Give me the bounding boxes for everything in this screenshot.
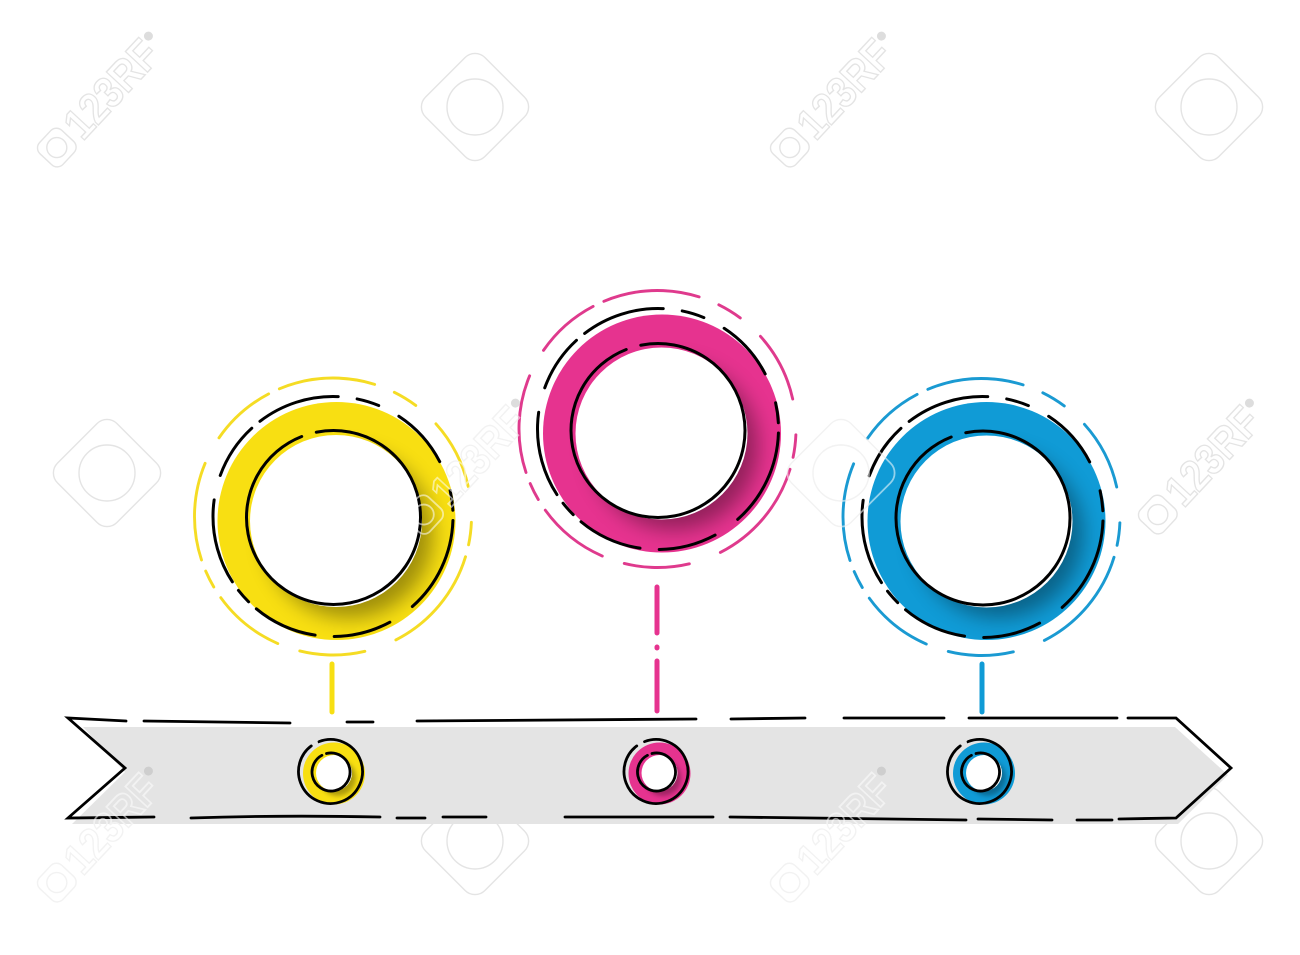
- watermark: camera middle left: [48, 414, 166, 532]
- watermark overlay: logo on banner right: 123RF: [787, 765, 902, 884]
- watermark overlay: logo on banner right: [761, 758, 909, 911]
- yellow ring: [189, 372, 477, 661]
- yellow ring outer dashed line: [189, 372, 477, 661]
- pink timeline marker: [622, 738, 690, 805]
- watermark overlay: logo on yellow ring: [395, 397, 536, 543]
- pink connector line: [654, 587, 660, 711]
- yellow connector line: [330, 664, 334, 712]
- watermark: logo top left: 123RF: [54, 30, 169, 149]
- banner grey fill: [72, 727, 1228, 824]
- watermark: logo bottom right: 123RF: [787, 765, 902, 884]
- blue ring inner dashed line: [881, 416, 1085, 620]
- watermark: logo top left: [28, 23, 176, 176]
- watermark: camera bottom centre: [416, 782, 534, 900]
- blue ring: [837, 373, 1126, 661]
- pink ring black dashed line: [534, 305, 782, 553]
- pink ring shadow: [590, 362, 758, 530]
- yellow disc: [218, 402, 456, 640]
- blue ring black dashed line: [858, 393, 1107, 641]
- blue ring shadow: [915, 450, 1083, 618]
- watermark overlay: logo on yellow ring: 123RF: [421, 397, 536, 516]
- pink ring: [513, 285, 802, 573]
- watermark: logo bottom left: [28, 758, 176, 911]
- blue ring white centre: [900, 436, 1072, 608]
- watermark: logo middle centre: [395, 390, 543, 543]
- watermark: camera middle right: [782, 414, 900, 532]
- blue timeline marker: [946, 738, 1015, 805]
- watermark overlay: logo on banner left: [28, 758, 176, 911]
- watermark: logo bottom right: [761, 758, 909, 911]
- yellow timeline marker: [297, 738, 365, 805]
- yellow ring shadow: [265, 450, 433, 618]
- pink ring inner dashed line: [556, 328, 760, 533]
- blue ring outer dashed line: [837, 373, 1126, 661]
- blue connector line: [980, 664, 984, 712]
- watermark: logo bottom left: 123RF: [54, 765, 169, 884]
- yellow ring inner dashed line: [231, 415, 436, 620]
- watermark: logo top right: [761, 23, 909, 176]
- watermark overlay: logo on banner left: 123RF: [54, 765, 169, 884]
- timeline arrow banner: [68, 718, 1231, 824]
- banner dashed outline: [68, 718, 1231, 820]
- watermark: logo top right: 123RF: [787, 30, 902, 149]
- pink ring outer dashed line: [513, 285, 802, 573]
- yellow ring black dashed line: [209, 393, 457, 640]
- pink disc: [543, 314, 781, 552]
- watermark: logo middle centre: 123RF: [421, 397, 536, 516]
- yellow ring white centre: [250, 435, 422, 607]
- watermark: logo far middle right: [1129, 390, 1277, 543]
- watermark: camera top centre: [416, 48, 534, 166]
- watermark overlay: camera on blue ring: [782, 414, 900, 532]
- watermark: camera far top right: [1150, 48, 1268, 166]
- pink ring white centre: [576, 348, 748, 520]
- watermark: logo far middle right: 123RF: [1155, 397, 1270, 516]
- blue disc: [868, 402, 1106, 640]
- watermark: camera far bottom right: [1150, 782, 1268, 900]
